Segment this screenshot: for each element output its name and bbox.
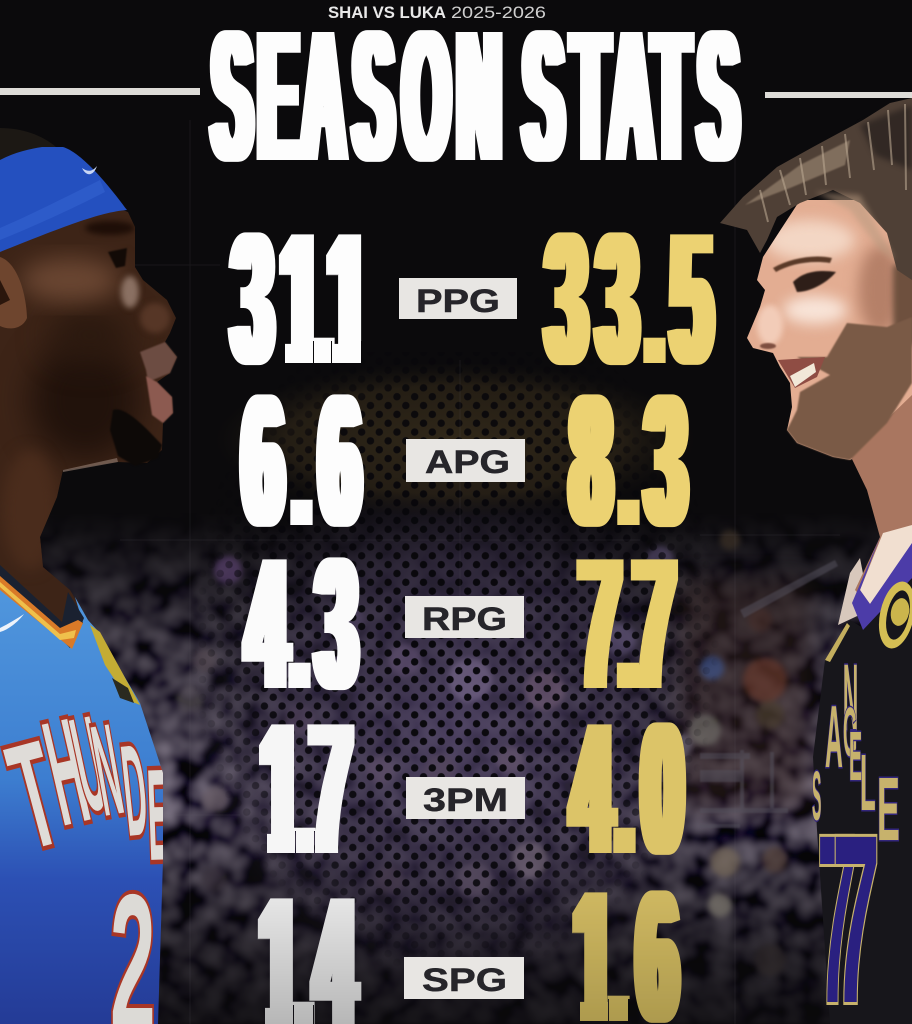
jersey (813, 575, 912, 1024)
jersey wordmark: N (84, 697, 131, 844)
title rule right (765, 92, 912, 98)
player right: Luka (720, 98, 912, 1024)
subtitle (328, 4, 546, 22)
face (747, 200, 912, 460)
headband (0, 147, 127, 252)
head (0, 210, 178, 623)
jersey wordmark: S (812, 756, 821, 835)
row: PPG: . (645, 210, 664, 400)
collar (0, 565, 84, 648)
gold trim (825, 623, 850, 662)
row: PPG: 1 (328, 196, 368, 404)
row: APG: 6 (320, 358, 360, 566)
jersey wordmark: E (145, 743, 173, 889)
jersey wordmark (812, 644, 900, 860)
row: APG: 8 (571, 358, 611, 566)
row: PPG: 3 (597, 196, 638, 404)
row: APG: . (619, 372, 638, 562)
lips (140, 342, 177, 382)
row: RPG: 7 (580, 521, 620, 729)
row: 3PM: 4 (572, 686, 612, 894)
eye (793, 271, 836, 292)
row: 3PM: 3PM (423, 782, 508, 818)
jersey wordmark: N (843, 644, 858, 751)
jersey wordmark (0, 712, 163, 864)
row: PPG: 5 (671, 196, 712, 404)
jersey wordmark: G (843, 693, 857, 771)
jersey wordmark: D (116, 717, 153, 865)
row: PPG (227, 232, 716, 366)
eye (108, 248, 127, 268)
row: PPG: 1 (280, 196, 321, 404)
jersey wordmark: E (877, 759, 900, 860)
row: RPG: . (290, 535, 309, 725)
jersey wordmark: E (849, 716, 862, 795)
ear (0, 257, 27, 328)
row: APG: APG (425, 444, 510, 480)
row: 3PM: . (615, 700, 634, 890)
beard (787, 317, 912, 460)
row: APG: 3 (646, 358, 686, 566)
subtitle: SHAI VS LUKA (328, 4, 446, 22)
nostril (760, 343, 776, 349)
row: 3PM (259, 722, 686, 855)
arena railings (700, 560, 838, 828)
row: PPG: 3 (546, 196, 587, 404)
row: RPG: . (619, 535, 637, 725)
title rule left (0, 88, 200, 95)
row: RPG: 3 (316, 521, 357, 729)
row: SPG (258, 890, 682, 1024)
title (212, 0, 738, 200)
beard (110, 409, 162, 466)
hair (0, 128, 56, 162)
brow (773, 256, 832, 272)
row: PPG: 3 (232, 196, 273, 404)
player left: Shai (0, 128, 177, 1024)
row: RPG (247, 521, 675, 729)
row: PPG: . (314, 210, 333, 400)
left shoulder skin (838, 558, 870, 625)
row: APG: 6 (243, 358, 283, 566)
collar (852, 537, 912, 630)
upper chest (860, 525, 912, 604)
row: RPG: 4 (247, 521, 287, 729)
subtitle: 2025-2026 (451, 4, 546, 22)
halftone dots (200, 372, 713, 955)
hair (720, 98, 912, 280)
jersey wordmark: L (860, 737, 876, 828)
jersey wordmark: A (825, 688, 843, 786)
row: RPG: 7 (634, 521, 675, 729)
neck (850, 395, 912, 606)
row: SPG: SPG (422, 962, 507, 998)
jersey wordmark: H (32, 688, 101, 858)
mouth (778, 357, 825, 388)
row: PPG: PPG (416, 283, 500, 319)
row: RPG: RPG (422, 601, 507, 637)
row: 3PM: 7 (311, 686, 351, 894)
row: APG (243, 358, 686, 566)
row: 3PM: 0 (642, 686, 683, 894)
row: 3PM: . (295, 700, 314, 890)
nike swoosh (0, 614, 24, 632)
patch (873, 578, 912, 652)
jersey wordmark: U (61, 688, 117, 840)
row: 3PM: 1 (261, 686, 301, 894)
logo patch (90, 625, 140, 705)
row: APG: . (292, 372, 311, 562)
jersey (0, 577, 163, 1024)
